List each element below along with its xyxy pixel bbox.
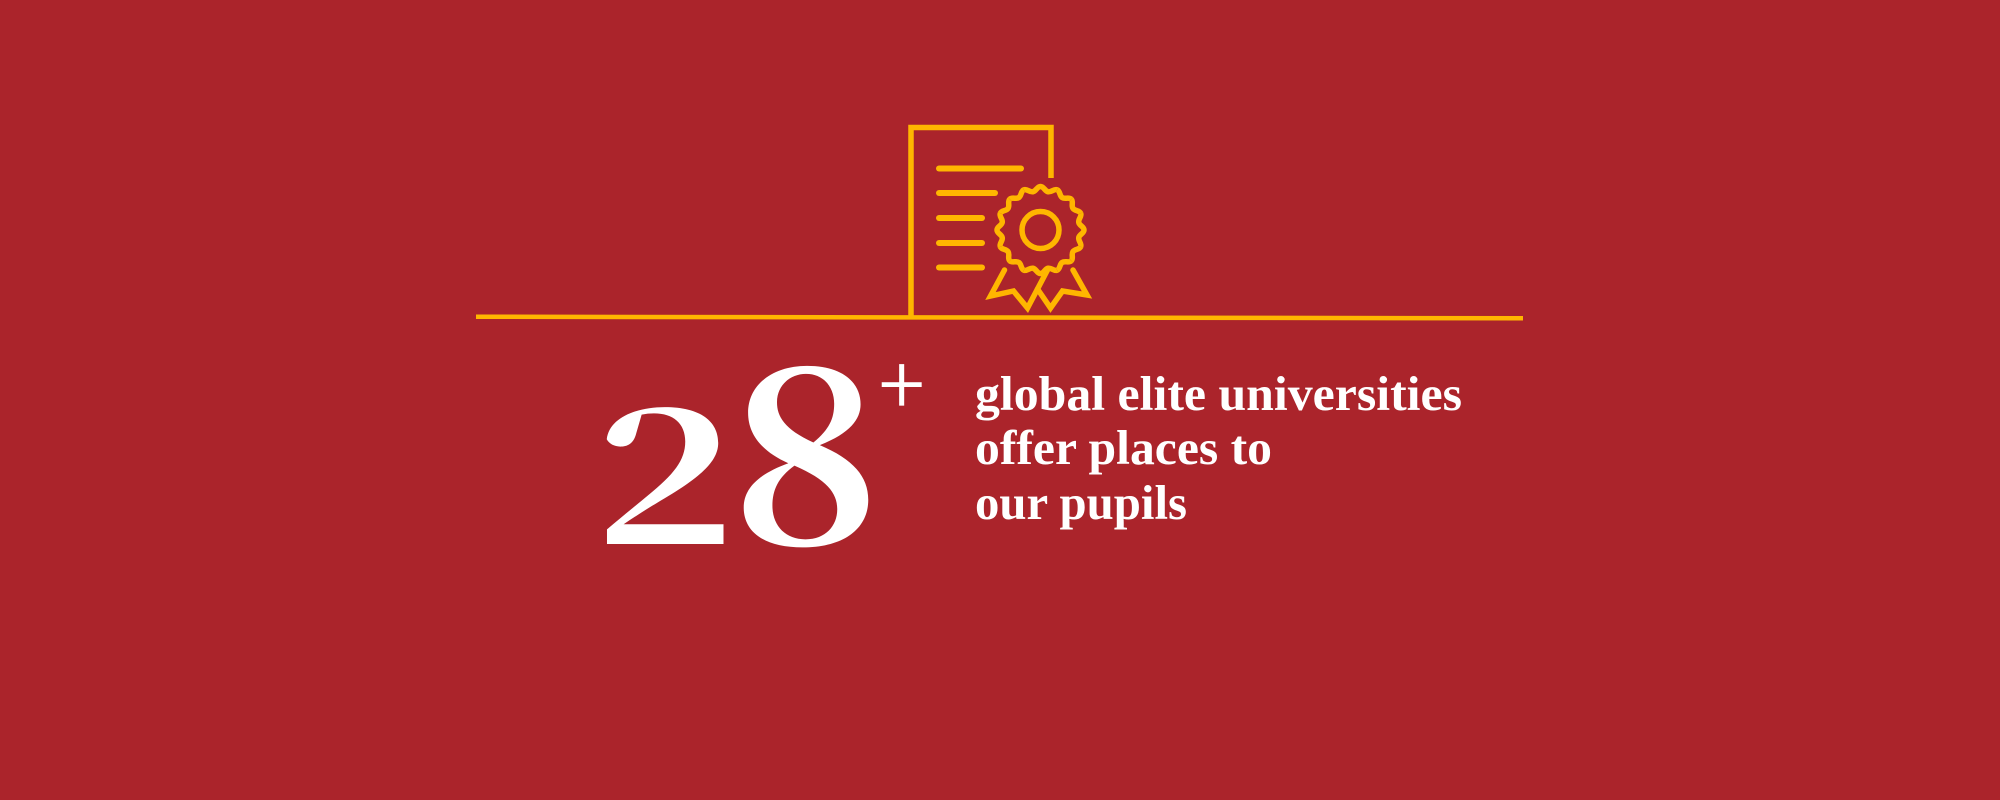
rosette seal	[994, 183, 1087, 277]
digit 2: 2	[593, 327, 735, 598]
icon: certificate with rosette	[911, 128, 1087, 317]
line 2: offer places to	[975, 420, 1272, 475]
rosette ribbons	[990, 270, 1087, 308]
line 3: our pupils	[975, 475, 1187, 530]
document text lines	[939, 168, 1021, 268]
plus sign: +	[880, 325, 924, 434]
horizontal divider line	[476, 317, 1523, 318]
line 1: global elite universities	[975, 366, 1462, 421]
big number 28+	[593, 263, 924, 614]
digit 8: 8	[730, 263, 881, 614]
description text	[975, 366, 1462, 530]
document outline	[911, 128, 1051, 317]
